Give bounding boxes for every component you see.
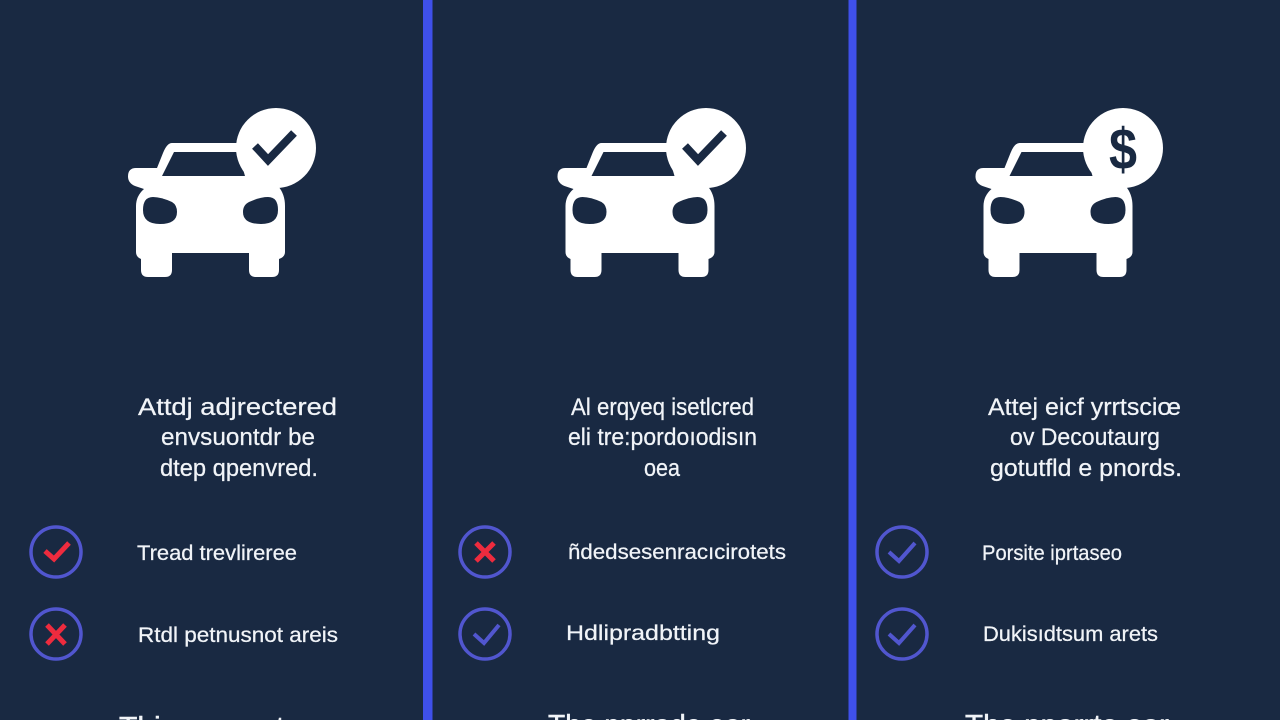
icon: blue check in circle — [877, 527, 927, 577]
text block: left description: Attdj adjrectered — [138, 394, 337, 421]
panel: middle column — [460, 108, 786, 720]
icon: red check in circle — [31, 527, 81, 577]
text block: middle description: Al erqyeq isetlcred — [571, 394, 754, 421]
divider: first blue rule — [423, 0, 432, 720]
icon: car with dollar badge — [976, 108, 1163, 277]
icon: blue check in circle — [460, 609, 510, 659]
text block: right description: ov Decoutaurg — [1010, 424, 1160, 451]
text: right row one: Porsite iprtaseo — [982, 541, 1122, 565]
text block: right description: gotutfld e pnords. — [990, 455, 1182, 482]
icon: blue check in circle — [877, 609, 927, 659]
text block: left description — [138, 394, 337, 482]
text block: middle description: eli tre:pordoıodisın — [568, 424, 757, 451]
icon: car with check badge — [128, 108, 316, 277]
text: right row two: Dukisıdtsum arets — [983, 622, 1158, 646]
icon: red cross in circle — [460, 527, 510, 577]
text block: middle description: oea — [644, 455, 681, 482]
panel: right column — [877, 108, 1182, 720]
panel: left column — [31, 108, 338, 720]
text block: right description: Attej eicf yrrtsciœ — [988, 394, 1181, 421]
text: left row one: Tread trevlireree — [137, 541, 297, 565]
text: middle row one: ñdedsesenracıcirotets — [568, 540, 786, 564]
icon: car with check badge — [558, 108, 746, 277]
text block: middle description — [568, 394, 757, 482]
text block: left description: envsuontdr be — [161, 424, 315, 451]
text block: left description: dtep qpenvred. — [160, 455, 318, 482]
icon: red cross in circle — [31, 609, 81, 659]
icon: car with dollar badge: $ — [1109, 117, 1137, 182]
text: middle row two: Hdlipradbtting — [566, 621, 720, 645]
text block: right description — [988, 394, 1182, 482]
text: left row two: Rtdl petnusnot areis — [138, 623, 338, 647]
divider: second blue rule — [848, 0, 856, 720]
